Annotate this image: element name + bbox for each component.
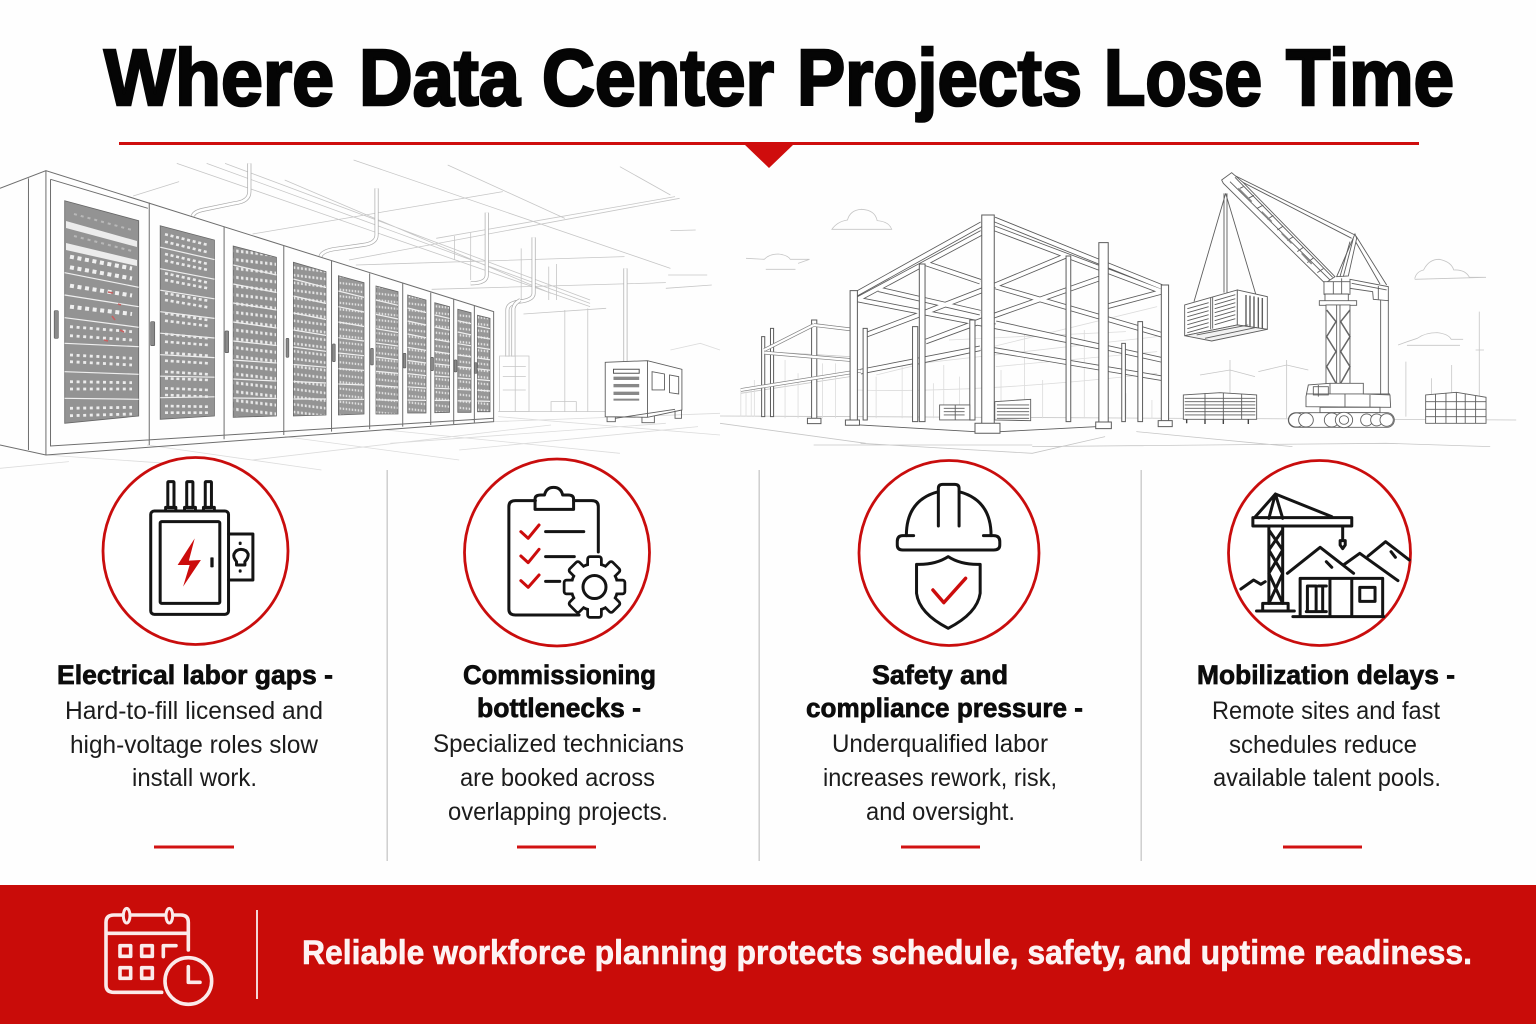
body text: [1212, 697, 1441, 792]
clouds: [746, 209, 1486, 345]
body text: and oversight.: [866, 798, 1015, 826]
title: Lose: [1104, 33, 1262, 122]
column dividers: [386, 470, 1142, 861]
ceiling, ducts, pipes and floor lines: [0, 160, 720, 470]
lifted container slings: [1194, 193, 1256, 302]
body text: [823, 730, 1057, 826]
heading: compliance pressure -: [806, 693, 1083, 723]
body text: available talent pools.: [1213, 764, 1441, 792]
body text: Hard-to-fill licensed and: [65, 697, 323, 725]
steel frame columns: [845, 215, 1172, 433]
panel: commissioning bottlenecks: [433, 459, 684, 848]
crane tower lattice: [1326, 305, 1350, 385]
icon: hard hat and shield in red circle: [859, 460, 1039, 646]
panel: electrical labor gaps: [57, 458, 333, 848]
body text: schedules reduce: [1229, 731, 1417, 759]
crane boom and cables: [1222, 173, 1387, 285]
server rack windows: [65, 201, 490, 423]
footer banner: [0, 885, 1536, 1024]
heading: [463, 660, 656, 723]
rack cabinet outlines: [0, 171, 494, 455]
title: Center: [542, 33, 774, 122]
body text: install work.: [132, 764, 257, 792]
body text: are booked across: [460, 764, 655, 792]
steel frame beams: [854, 219, 1165, 378]
accent dash: [901, 846, 980, 848]
heading: [806, 660, 1083, 723]
title: Projects: [797, 33, 1082, 122]
body text: [433, 730, 684, 826]
body text: Underqualified labor: [832, 730, 1048, 758]
illustration: data center hall with server racks: [0, 160, 720, 470]
body text: Remote sites and fast: [1212, 697, 1440, 725]
crane and lifted load: [1183, 173, 1394, 428]
title: Time: [1286, 33, 1454, 122]
ground and distant structures: [720, 307, 1516, 453]
wind turbines: [1200, 360, 1308, 418]
heading: Commissioning: [463, 660, 656, 690]
accent dash: [154, 846, 234, 848]
accent dash: [1283, 846, 1362, 848]
icon: clipboard checklist with gear in red circle: [464, 459, 650, 646]
body text: [65, 697, 323, 792]
accent dash: [517, 846, 596, 848]
title rule with pointer: [119, 142, 1419, 168]
crate on skids: [1183, 393, 1257, 424]
body text: high-voltage roles slow: [70, 731, 319, 759]
lifted cooling container: [1185, 290, 1267, 341]
panel: mobilization delays: [1197, 460, 1455, 848]
generator unit: [605, 361, 682, 423]
heading: Electrical labor gaps -: [57, 660, 333, 690]
heading: Mobilization delays -: [1197, 660, 1455, 690]
icon: electrical panel in red circle: [103, 458, 288, 644]
title: Where: [104, 33, 334, 122]
heading: bottlenecks -: [477, 693, 641, 723]
footer divider: [256, 910, 258, 999]
body text: overlapping projects.: [448, 798, 668, 826]
body text: Specialized technicians: [433, 730, 684, 758]
icon: calendar with clock: [106, 908, 212, 1004]
crawler base: [1288, 383, 1394, 428]
small equipment under frame: [940, 399, 1031, 421]
stacked material pallet: [1426, 392, 1486, 423]
electrical cabinet: [500, 356, 529, 412]
icon: crane, site cabin and mountains in red circle: [1228, 460, 1410, 646]
title: [104, 33, 1454, 122]
secondary frame columns: [741, 320, 866, 424]
rack door handles: [54, 311, 477, 373]
illustration: steel frame construction site with crane: [720, 173, 1516, 453]
panel: safety and compliance pressure: [806, 460, 1083, 848]
body text: increases rework, risk,: [823, 764, 1057, 792]
heading: Safety and: [872, 660, 1008, 690]
title: Data: [359, 33, 520, 122]
footer message: Reliable workforce planning protects schedule, safety, and uptime readiness.: [302, 934, 1472, 972]
crane turntable and counter jib: [1319, 278, 1388, 394]
